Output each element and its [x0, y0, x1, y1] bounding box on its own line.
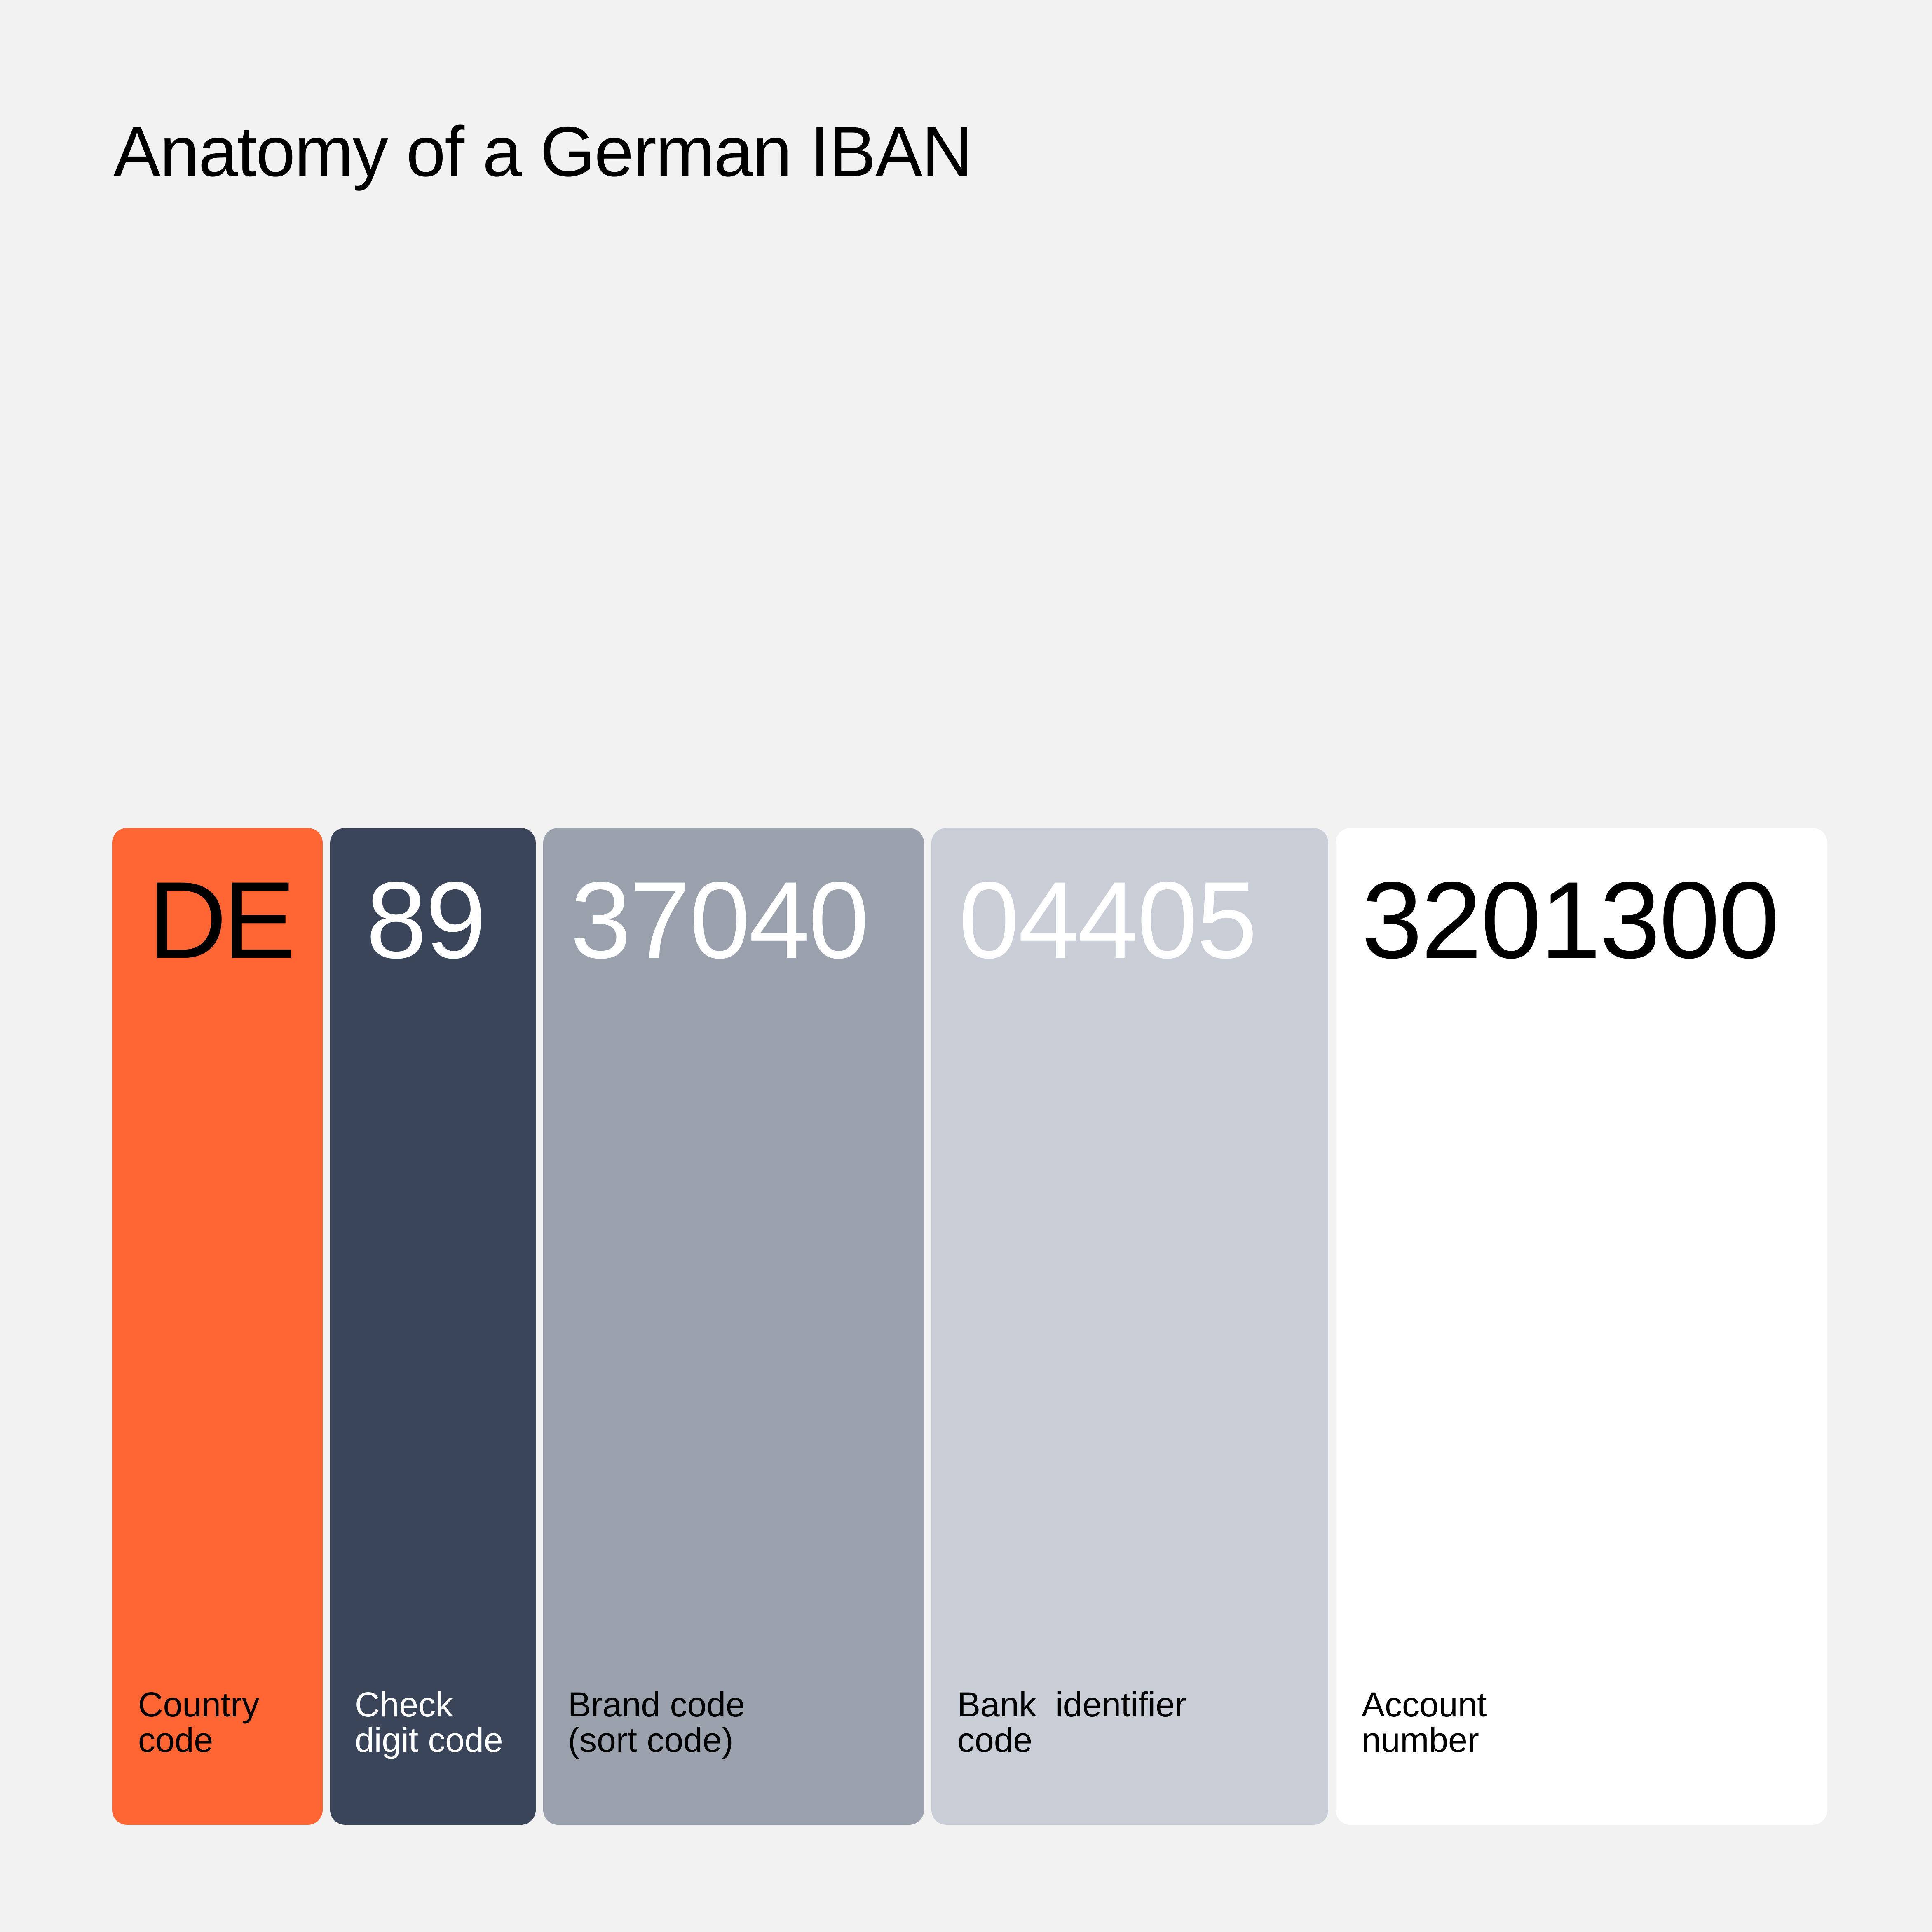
label: check digit code: digit code — [355, 1721, 503, 1759]
label: brand code: (sort code) — [568, 1721, 733, 1759]
panel: bank identifier code — [931, 828, 1328, 1825]
number: 04405: 04405 — [959, 859, 1256, 981]
label: bank identifier code — [957, 1687, 1186, 1758]
label: country code — [138, 1687, 259, 1758]
title: Anatomy of a German IBAN — [113, 112, 972, 191]
panel: check digit code — [330, 828, 536, 1825]
panel: account number — [1336, 828, 1827, 1825]
number: 37040: 37040 — [570, 859, 868, 981]
number: 89: 89 — [366, 859, 485, 981]
label: bank identifier code: Bank identifier — [957, 1685, 1186, 1724]
label: brand code: Brand code — [568, 1685, 745, 1724]
label: country code: code — [138, 1721, 213, 1759]
label: account number: number — [1362, 1721, 1479, 1759]
label: account number — [1362, 1687, 1487, 1758]
panel: country code — [112, 828, 323, 1825]
number: 3201300: 3201300 — [1362, 859, 1778, 981]
number: DE: DE — [148, 859, 291, 981]
label: account number: Account — [1362, 1685, 1487, 1724]
label: brand code — [568, 1687, 745, 1758]
label: bank identifier code: code — [957, 1721, 1032, 1759]
panel: brand code — [543, 828, 924, 1825]
label: country code: Country — [138, 1685, 259, 1724]
label: check digit code — [355, 1687, 503, 1758]
label: check digit code: Check — [355, 1685, 453, 1724]
